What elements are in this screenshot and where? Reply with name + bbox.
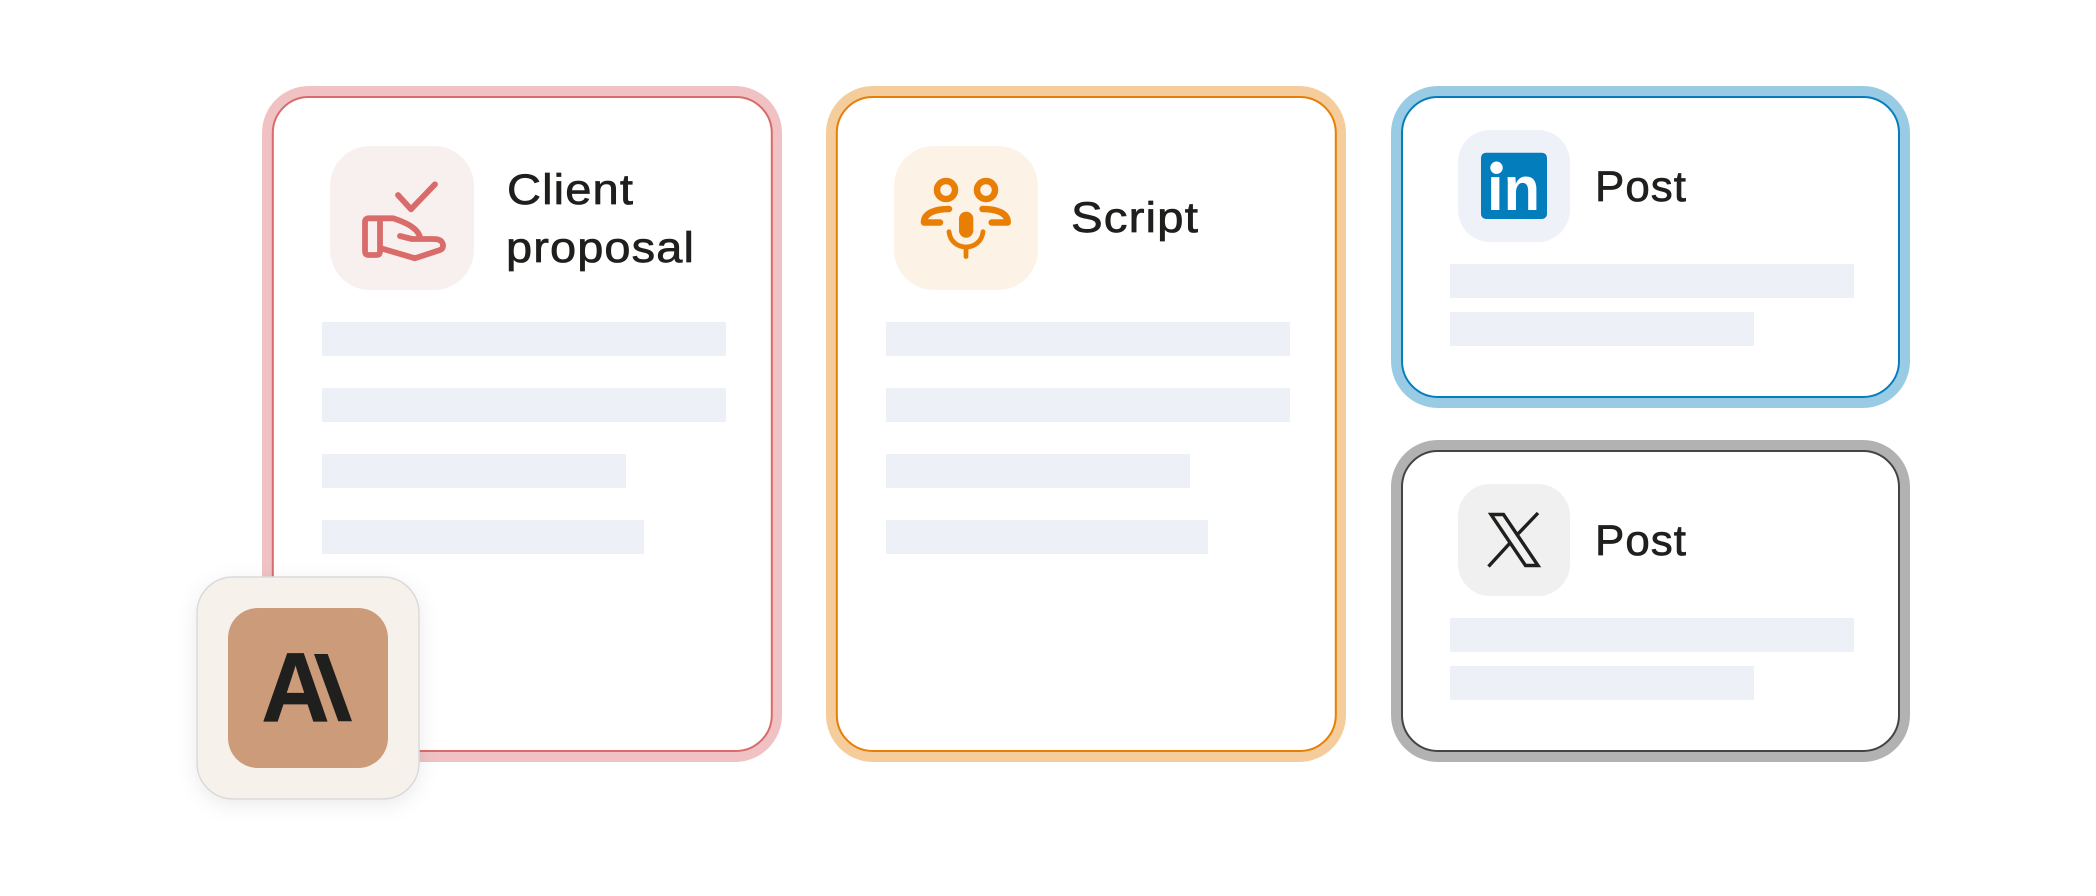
icon: linkedin logo: [1458, 130, 1570, 242]
panel: script card: [826, 86, 1346, 762]
heading: post: Post: [1595, 163, 1687, 211]
heading: client proposal: [506, 166, 695, 272]
text placeholder bars: [1450, 618, 1854, 700]
text placeholder bars: [322, 322, 726, 554]
heading: client proposal: Client: [507, 166, 634, 214]
icon: anthropic badge: [197, 577, 419, 799]
icon: linkedin logo: in: [1487, 154, 1540, 224]
panel: linkedin post card: [1391, 86, 1910, 408]
icon: hand with check mark: [330, 146, 474, 290]
text placeholder bars: [1450, 264, 1854, 346]
text placeholder bars: [886, 322, 1290, 554]
heading: script: Script: [1071, 194, 1199, 242]
panel: x post card: [1391, 440, 1910, 762]
icon: x logo: [1458, 484, 1570, 596]
heading: client proposal: proposal: [506, 224, 695, 272]
icon: two people and microphone: [894, 146, 1038, 290]
icon: anthropic badge: A: [262, 632, 330, 742]
heading: post: Post: [1595, 517, 1687, 565]
panel: client proposal card: [262, 86, 782, 762]
